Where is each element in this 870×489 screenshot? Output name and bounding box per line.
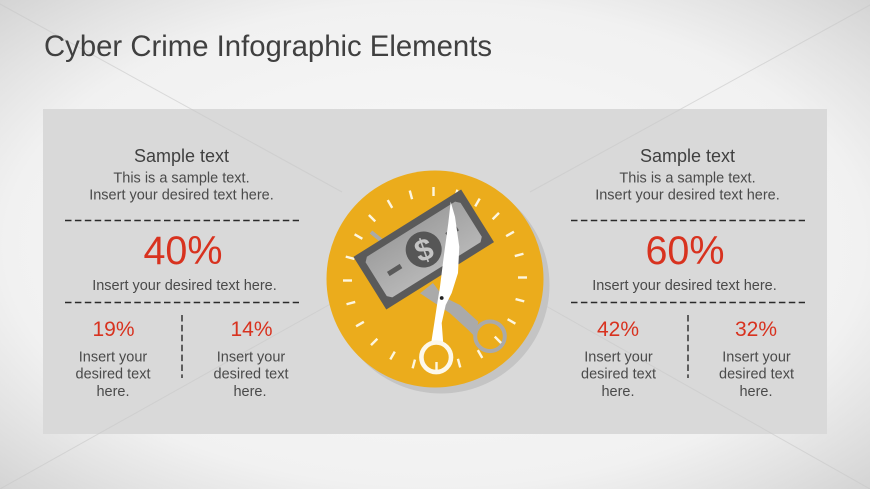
left description: Insert your desired text here. [89,188,274,204]
clock circle [326,170,544,388]
stat 32%: Insert your [722,350,791,366]
dollar coin: $ [410,231,438,269]
dollar coin [399,224,449,275]
right heading: Sample text [640,146,735,166]
stat 42%: desired text [581,366,656,382]
stat 19%: desired text [76,366,150,382]
stat 32% [719,318,794,400]
title: Cyber Crime Infographic Elements [44,30,492,63]
right description: This is a sample text. [619,170,756,186]
white scissor blade [431,202,459,344]
stat 14%: 14% [230,318,273,341]
left main percentage: 40% [143,229,223,273]
right column [571,146,805,400]
stat 42% [581,318,656,400]
stat 14%: Insert your [217,350,285,366]
stat 19%: Insert your [79,350,147,366]
left column [65,146,299,400]
panel: main content [43,109,827,434]
stat 32%: 32% [735,318,777,341]
stat 14%: desired text [214,366,288,382]
left heading: Sample text [134,146,229,166]
central illustration [326,170,550,394]
stat 42%: Insert your [584,350,653,366]
stat 42%: here. [601,384,635,400]
stat 32%: here. [739,384,773,400]
stat 42%: 42% [597,318,639,341]
left description: This is a sample text. [113,170,250,186]
banknote [353,190,494,309]
right description [595,170,780,204]
stat 19%: 19% [92,318,135,341]
right main percentage: 60% [645,229,725,273]
stat 14%: here. [233,384,267,400]
scissor pivot [440,296,444,300]
grey scissor handle [371,232,505,351]
circle shadow [332,176,550,394]
clock ticks [343,187,527,371]
stat 19% [76,318,150,400]
right description: Insert your desired text here. [595,188,780,204]
stat 19%: here. [96,384,130,400]
left main caption: Insert your desired text here. [92,278,277,294]
white scissor handle [421,342,451,372]
left description [89,170,274,204]
stat 32%: desired text [719,366,794,382]
stat 14% [214,318,288,400]
right main caption: Insert your desired text here. [592,278,777,294]
